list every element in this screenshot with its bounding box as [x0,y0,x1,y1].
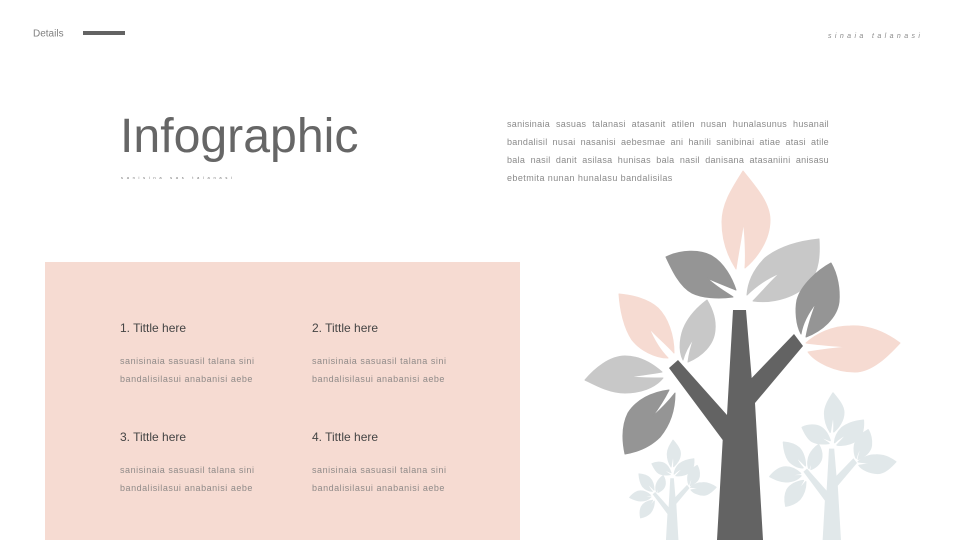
item 2: 2. Tittle here [312,321,378,335]
leaf: lower left dark [623,390,675,454]
intro paragraph: sanisinaia sasuas talanasi atasanit atilen nusan hunalasunus husanail [507,119,829,129]
item 3 [120,430,254,493]
item 3: 3. Tittle here [120,430,186,444]
subtitle: sanisina sas talanasi [121,175,236,180]
top right caption: sinaia talanasi [828,33,923,40]
leaf: right pink [806,326,900,372]
leaf: right dark [796,263,839,337]
title: Infographic [120,109,358,163]
item 4: bandalisilasui anabanisi aebe [312,483,445,493]
item 1 [120,321,254,384]
leaf: upper left dark [666,251,736,298]
section label: Details [33,28,64,40]
item 2: bandalisilasui anabanisi aebe [312,374,445,384]
intro paragraph: ebetmita nunan hunalasu bandalisilas [507,173,673,183]
main tree [585,171,900,540]
item 4 [312,430,446,493]
small tree right [770,393,896,540]
leaf: left pink [619,294,674,358]
small tree left [630,440,716,540]
item 2 [312,321,446,384]
leaf: top pink [722,171,770,269]
item 3: sanisinaia sasuasil talana sini [120,465,254,475]
item 1: sanisinaia sasuasil talana sini [120,356,254,366]
item 4: 4. Tittle here [312,430,378,444]
trunk [669,310,803,540]
item 4: sanisinaia sasuasil talana sini [312,465,446,475]
item 1: bandalisilasui anabanisi aebe [120,374,253,384]
leaf: small light [680,300,715,362]
leaf: upper right light [747,239,819,302]
item 2: sanisinaia sasuasil talana sini [312,356,446,366]
leaf: left light [585,356,663,393]
panel: pink items [45,262,520,540]
item 3: bandalisilasui anabanisi aebe [120,483,253,493]
intro paragraph: bandalisil nusai nasanisi aebesmae ani hanili sanibinai atiae atasi atile [507,137,829,147]
item 1: 1. Tittle here [120,321,186,335]
header accent bar [83,31,125,35]
intro paragraph: bala nasil danit asilasa hunisas bala nasil danisana atasaniini anisasu [507,155,829,165]
intro paragraph [507,119,829,183]
